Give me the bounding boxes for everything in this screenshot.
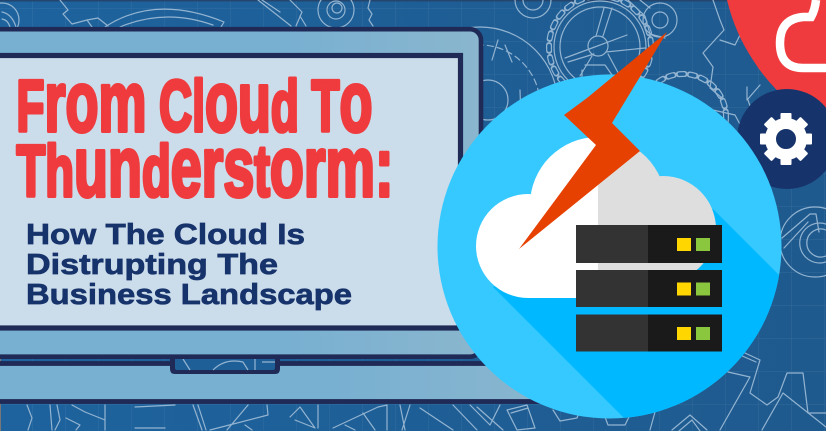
laptop illustration: [0, 29, 560, 401]
server unit 1: [576, 225, 722, 263]
subtitle: [26, 219, 352, 311]
long shadow: [493, 209, 790, 419]
laptop screen: [0, 56, 460, 328]
laptop base: [0, 358, 560, 402]
server stack: [576, 225, 722, 352]
subtitle: Distrupting The: [26, 249, 278, 281]
subtitle: Business Landscape: [26, 279, 352, 311]
server unit 3: [576, 314, 722, 352]
laptop notch: [170, 358, 280, 374]
settings gear badge: [737, 89, 826, 189]
title: [16, 55, 393, 215]
cloud server circle: [438, 74, 790, 419]
title: Thunderstorm:: [16, 120, 393, 215]
red corner badge: [727, 0, 826, 125]
server unit 2: [576, 270, 722, 307]
icon: cloud: [476, 137, 716, 298]
icon: lightning bolt: [519, 32, 667, 249]
icon: gear: [760, 113, 812, 165]
laptop lid bezel: [0, 29, 481, 357]
subtitle: How The Cloud Is: [26, 219, 305, 251]
title: From Cloud To: [16, 55, 372, 150]
white outline icon: [780, 0, 826, 68]
